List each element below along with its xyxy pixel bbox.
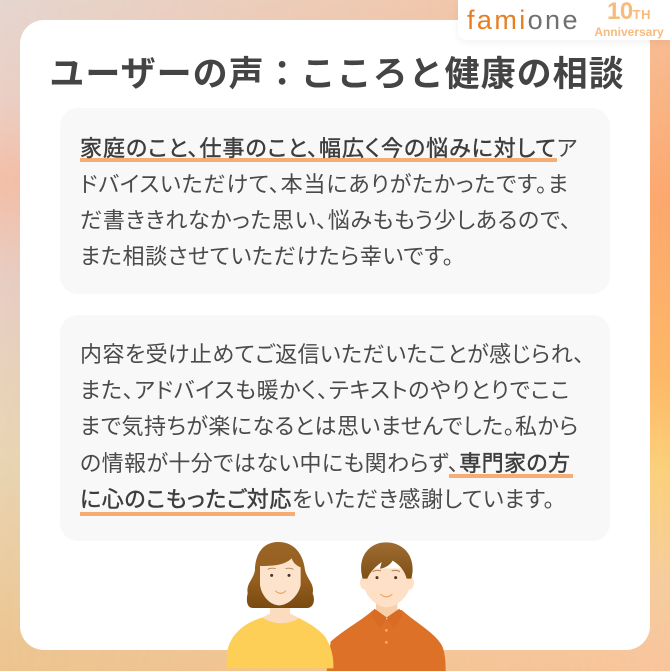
testimonial 2 text: に心のこもったご対応をいただき感謝しています。 — [80, 487, 555, 512]
testimonial 1 text: ドバイスいただけて、本当にありがたかったです。ま — [80, 172, 569, 197]
testimonial 2 text: の情報が十分ではない中にも関わらず、専門家の方 — [80, 451, 570, 476]
illustration: two people — [226, 542, 446, 671]
logo wordmark: famione — [467, 5, 580, 35]
panel: first testimonial — [60, 108, 610, 294]
highlight underline — [449, 474, 573, 478]
logo badge — [458, 0, 670, 40]
testimonial 2 text — [80, 342, 585, 512]
man — [327, 542, 446, 671]
highlight underline — [80, 512, 295, 516]
highlight underline — [80, 158, 557, 162]
testimonial 2 text: 内容を受け止めてご返信いただいたことが感じられ、 — [80, 342, 585, 367]
testimonial 2 text: また、アドバイスも暖かく、テキストのやりとりでここ — [80, 378, 570, 403]
10th anniversary mark — [594, 0, 664, 39]
testimonial 2 text: まで気持ちが楽になるとは思いませんでした。私から — [80, 414, 579, 439]
testimonial 1 text: だ書ききれなかった思い、悩みももう少しあるので、 — [80, 208, 572, 233]
testimonial 1 text: 家庭のこと、仕事のこと、幅広く今の悩みに対してア — [80, 136, 578, 161]
title: ユーザーの声：こころと健康の相談 — [49, 55, 625, 94]
testimonial 1 text — [80, 136, 578, 269]
woman — [227, 542, 333, 668]
10th anniversary mark: Anniversary — [594, 25, 664, 39]
testimonial 1 text: また相談させていただけたら幸いです。 — [80, 244, 454, 269]
panel: second testimonial — [60, 315, 610, 541]
